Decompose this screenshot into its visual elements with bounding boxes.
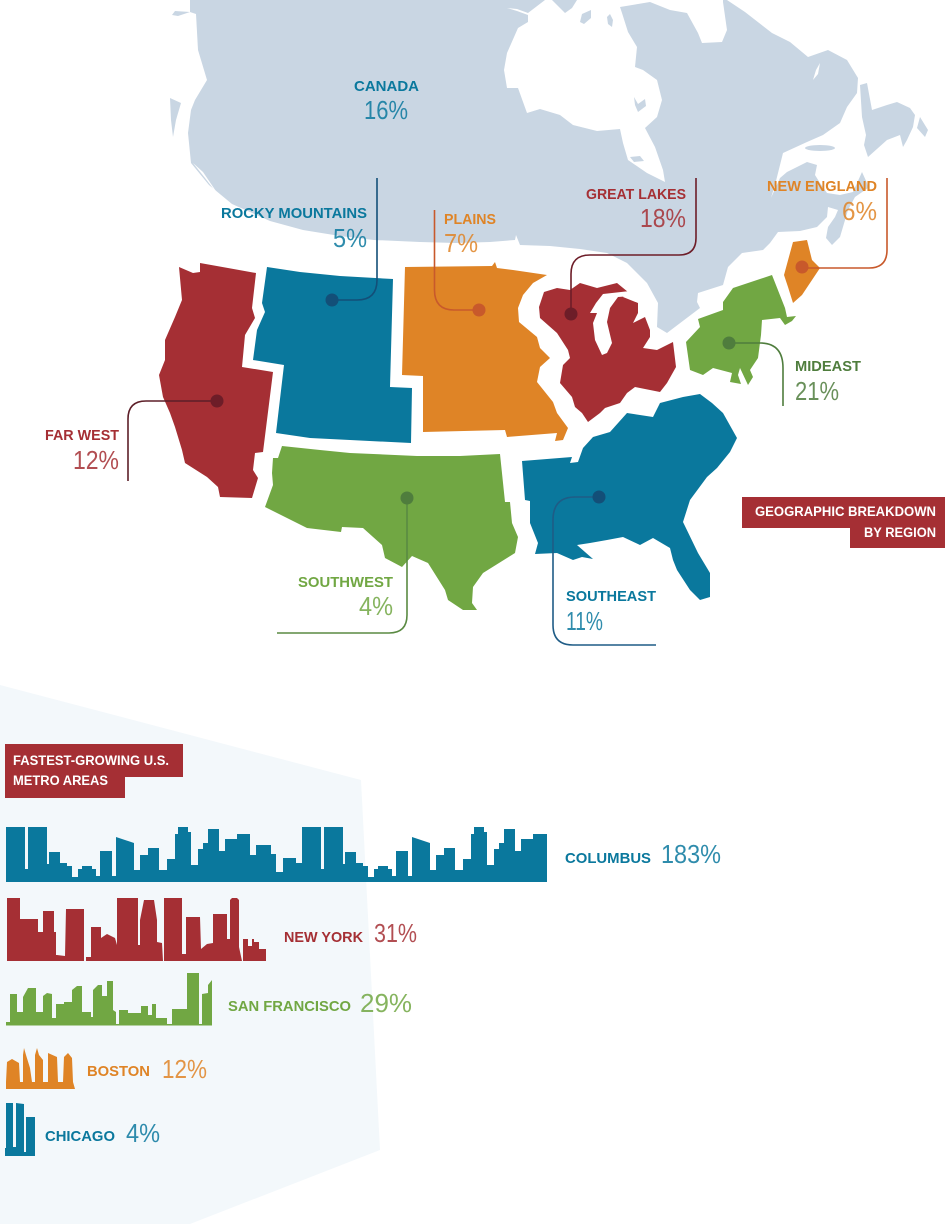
callout: Great Lakes 18%: GREAT LAKES <box>586 186 686 203</box>
skyline bar: Columbus 183% <box>6 827 721 882</box>
label: Canada 16% <box>354 78 419 125</box>
callout: Rocky Mountains 5%: ROCKY MOUNTAINS <box>221 205 367 222</box>
skyline bar: Chicago 4%: 4% <box>126 1118 160 1148</box>
callout: Far West 12%: FAR WEST <box>45 427 119 444</box>
skyline bar: Boston 12%: BOSTON <box>87 1063 150 1080</box>
callout: Southwest 4%: 4% <box>359 591 393 621</box>
map region: Southeast <box>522 394 737 600</box>
map region: Mideast <box>686 275 796 385</box>
skyline bar: Boston 12%: 12% <box>162 1054 207 1084</box>
heading: geographic breakdown by region <box>742 497 945 548</box>
skyline bar: Columbus 183%: 183% <box>661 839 721 869</box>
skyline bar: Columbus 183%: COLUMBUS <box>565 850 651 867</box>
callout: Rocky Mountains 5%: 5% <box>333 223 367 253</box>
callout: New England 6% <box>767 178 887 274</box>
callout: New England 6%: NEW ENGLAND <box>767 178 877 195</box>
callout: Southeast 11%: 11% <box>566 606 603 636</box>
skyline bar: Chicago 4% <box>5 1103 160 1156</box>
callout: Southwest 4% <box>277 492 414 633</box>
callout: Great Lakes 18%: 18% <box>640 203 686 233</box>
callout: Plains 7%: PLAINS <box>444 211 496 228</box>
skyline bar: San Francisco 29% <box>6 973 412 1026</box>
skyline bar: Boston 12% <box>6 1048 207 1089</box>
callout: New England 6%: 6% <box>842 196 877 226</box>
callout: Far West 12% <box>45 394 224 481</box>
map region: Plains <box>402 262 568 441</box>
callout: Southeast 11% <box>553 490 656 645</box>
callout: Great Lakes 18% <box>564 178 696 320</box>
map region: Rocky Mountains <box>253 267 412 443</box>
callout: Southwest 4%: SOUTHWEST <box>298 574 393 591</box>
callout: Mideast 21%: 21% <box>795 376 839 406</box>
callout: Mideast 21%: MIDEAST <box>795 358 861 375</box>
skyline bar: San Francisco 29%: SAN FRANCISCO <box>228 998 351 1015</box>
skyline bar: New York 31%: NEW YORK <box>284 929 363 946</box>
callout: Plains 7% <box>434 210 496 316</box>
label: Canada 16%: 16% <box>364 95 408 125</box>
heading: fastest-growing U.S. metro areas: FASTEST-GROWING U.S. <box>13 753 169 768</box>
label: Canada 16%: CANADA <box>354 78 419 95</box>
background panel: metro section <box>0 685 380 1224</box>
heading: geographic breakdown by region: BY REGION <box>864 525 936 540</box>
skyline bar: New York 31% <box>7 898 417 961</box>
map region: Far West <box>159 263 273 498</box>
skyline bar: San Francisco 29%: 29% <box>360 988 412 1018</box>
map: Canada <box>170 0 928 333</box>
callout: Mideast 21% <box>722 336 861 406</box>
heading: fastest-growing U.S. metro areas: METRO AREAS <box>13 773 108 788</box>
callout: Far West 12%: 12% <box>73 445 119 475</box>
callout: Rocky Mountains 5% <box>221 178 377 306</box>
skyline bar: Chicago 4%: CHICAGO <box>45 1128 115 1145</box>
map region: Southwest <box>265 446 518 610</box>
map region: Great Lakes <box>539 283 676 422</box>
map region: New England <box>784 240 820 303</box>
callout: Southeast 11%: SOUTHEAST <box>566 588 656 605</box>
skyline bar: New York 31%: 31% <box>374 918 417 948</box>
heading: geographic breakdown by region: GEOGRAPHIC BREAKDOWN <box>755 504 936 519</box>
heading: fastest-growing U.S. metro areas <box>5 744 183 798</box>
callout: Plains 7%: 7% <box>444 228 478 258</box>
